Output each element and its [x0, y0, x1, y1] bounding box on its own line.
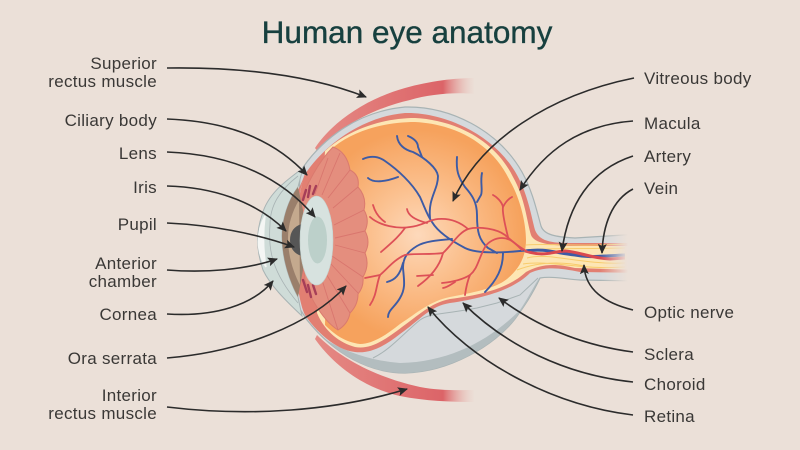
title: Human eye anatomy: [262, 14, 553, 50]
label: ora serrata: Ora serrata: [68, 349, 157, 368]
arrow: vitreous body: [453, 78, 634, 201]
arrow: vein: [602, 189, 633, 253]
label: iris: Iris: [133, 178, 157, 197]
nerve fade: [600, 225, 644, 290]
arrow: optic nerve: [584, 265, 633, 310]
arrow: superior rectus muscle: [167, 68, 366, 97]
eye anatomy diagram: [258, 78, 644, 402]
label: pupil: Pupil: [118, 215, 157, 234]
retina: [317, 118, 640, 348]
arrow: anterior chamber: [167, 259, 277, 271]
label: vein: Vein: [644, 179, 678, 198]
label: optic nerve: Optic nerve: [644, 303, 734, 322]
ciliary folds: [315, 153, 365, 330]
optic nerve artery and vein: [526, 250, 625, 257]
iris inner: [288, 200, 300, 285]
arrow: cornea: [167, 281, 273, 314]
iris: [282, 187, 303, 297]
sclera inner line: [373, 278, 538, 358]
arrow: iris: [167, 186, 286, 231]
lens: [300, 196, 333, 285]
arrow: sclera: [499, 298, 633, 352]
retinal veins: [363, 136, 530, 317]
nerve fibres: [517, 244, 625, 270]
label: ciliary body: Ciliary body: [65, 111, 157, 130]
arrow: lens: [167, 152, 315, 217]
arrow: ciliary body: [167, 119, 307, 175]
vitreous body: [325, 122, 526, 344]
label: anterior chamber: Anterior: [95, 254, 157, 273]
label: choroid: Choroid: [644, 375, 706, 394]
pupil: [290, 224, 302, 256]
label: lens: Lens: [119, 144, 157, 163]
label: sclera: Sclera: [644, 345, 694, 364]
arrow: retina: [428, 307, 633, 415]
label: superior rectus muscle: rectus muscle: [48, 72, 157, 91]
label: retina: Retina: [644, 407, 695, 426]
cornea inner line: [270, 176, 298, 303]
label: cornea: Cornea: [99, 305, 157, 324]
label: interior rectus muscle: Interior: [102, 386, 157, 405]
ciliary processes: [303, 186, 316, 297]
arrow: pupil: [167, 223, 294, 247]
arrow: ora serrata: [167, 286, 346, 358]
label: anterior chamber: chamber: [89, 272, 157, 291]
leader arrows: [167, 68, 634, 415]
label: vitreous body: Vitreous body: [644, 69, 752, 88]
arrow: choroid: [463, 303, 633, 382]
choroid: [295, 113, 640, 352]
arrow: interior rectus muscle: [167, 389, 407, 412]
choroid front edge: [292, 172, 318, 321]
retinal arteries: [365, 195, 530, 305]
sclera: [296, 107, 640, 373]
lens nucleus: [308, 216, 327, 264]
ciliary muscle and ora serrata: [298, 147, 368, 330]
anterior chamber and cornea: [258, 168, 303, 316]
label: interior rectus muscle: rectus muscle: [48, 404, 157, 423]
sclera lower shadow: [325, 278, 539, 373]
superior rectus muscle: [315, 78, 475, 152]
cornea highlight: [258, 216, 266, 267]
arrow: artery: [562, 156, 633, 251]
label: macula: Macula: [644, 114, 701, 133]
inferior rectus muscle: [315, 335, 475, 402]
label: artery: Artery: [644, 147, 691, 166]
arrow: macula: [520, 121, 633, 190]
labels right: [644, 69, 752, 426]
label: superior rectus muscle: Superior: [90, 54, 157, 73]
optic nerve: [517, 244, 625, 270]
labels left: [48, 54, 157, 423]
